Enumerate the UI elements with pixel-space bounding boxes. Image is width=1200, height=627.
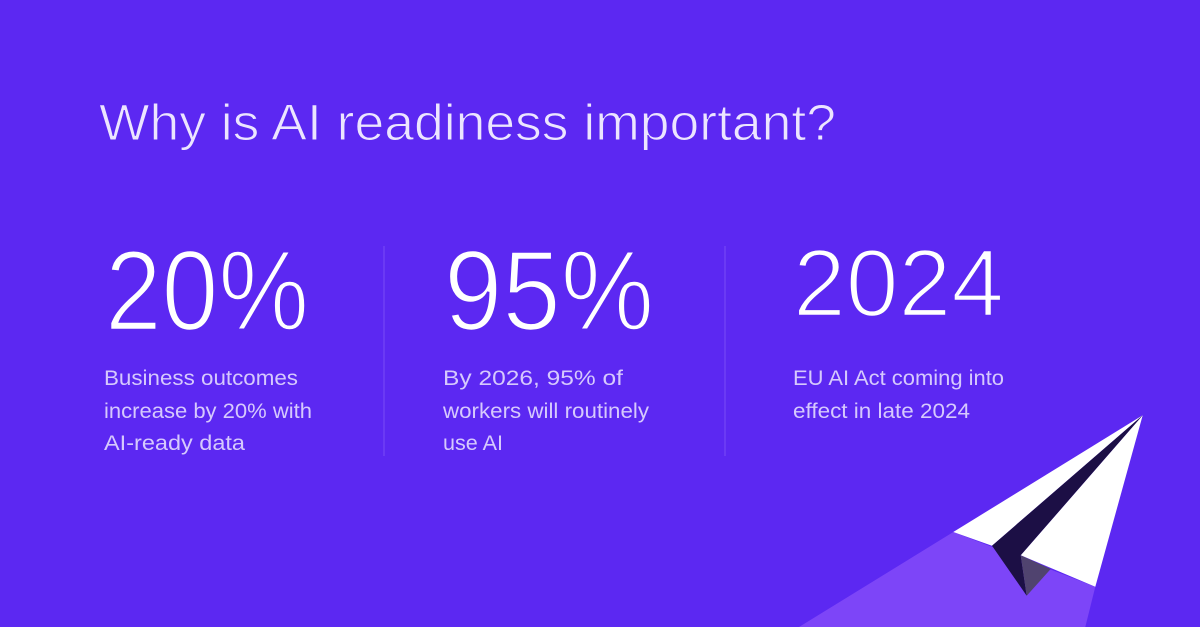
plane trail: [799, 532, 1095, 627]
plane centre fold: [992, 415, 1143, 596]
stat number: 95%: 95%: [444, 228, 654, 355]
description: business outcomes: [104, 367, 312, 455]
description: EU AI Act: effect in late 2024: [793, 400, 970, 423]
panel: 95% statistic: [442, 228, 654, 455]
title: Why is AI readiness important?: [99, 94, 836, 151]
description: EU AI Act: EU AI Act coming into: [793, 367, 1004, 390]
plane keel shadow: [1021, 555, 1051, 596]
description: business outcomes: Business outcomes: [104, 367, 298, 390]
stat number: 2024: 2024: [793, 230, 1004, 337]
icon: paper plane with trail: [799, 415, 1143, 627]
description: workers using AI: By 2026, 95% of: [443, 367, 623, 390]
plane right wing: [1021, 415, 1143, 587]
plane left wing: [953, 415, 1143, 546]
panel: 2024 statistic: [793, 230, 1004, 423]
description: workers using AI: use AI: [443, 432, 503, 455]
description: business outcomes: increase by 20% with: [104, 400, 312, 423]
description: workers using AI: workers will routinely: [442, 400, 650, 423]
description: EU AI Act: [793, 367, 1004, 423]
description: workers using AI: [442, 367, 650, 455]
panel: 20% statistic: [104, 228, 312, 455]
description: business outcomes: AI-ready data: [104, 432, 245, 455]
stat number: 20%: 20%: [105, 228, 309, 355]
